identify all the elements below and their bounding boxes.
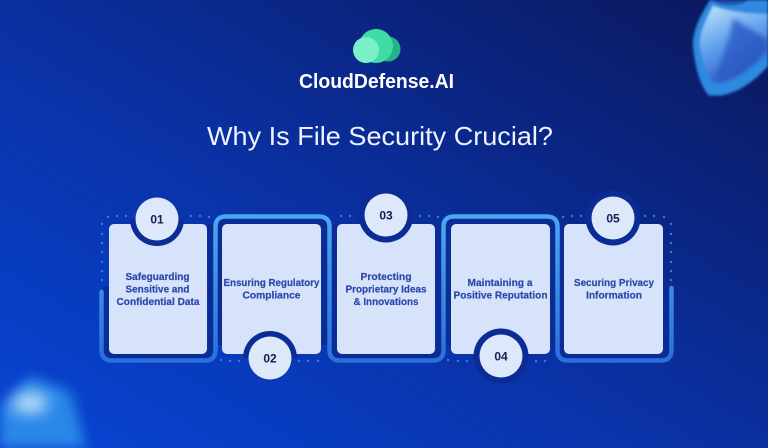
- logo icon: cloud: [353, 29, 400, 63]
- text: card 3 label: Proprietary Ideas: [346, 284, 427, 296]
- panel: card 3: [337, 224, 435, 354]
- text: card 4 label: Positive Reputation: [454, 290, 548, 302]
- badge 05: [586, 190, 640, 246]
- panel: card 4: [451, 224, 550, 354]
- text: card 4 label: Maintaining a: [468, 278, 533, 289]
- badge 02: [243, 331, 297, 380]
- badge 03: [358, 188, 414, 242]
- badge 02: 02: [263, 352, 277, 366]
- text: card 2 label: Ensuring Regulatory: [224, 278, 320, 289]
- logo wordmark: CloudDefense.AI: [299, 71, 454, 93]
- badge 03: 03: [379, 208, 393, 222]
- icon: shield top right: [693, 0, 768, 96]
- text: card 1 label: [116, 272, 200, 308]
- panel: card 1: [109, 224, 207, 354]
- badge 05: 05: [606, 212, 620, 226]
- badge 04: 04: [494, 350, 508, 364]
- text: card 1 label: Safeguarding: [126, 272, 190, 283]
- panel: card 5: [564, 224, 663, 354]
- text: card 4 label: [454, 278, 548, 302]
- text: card 1 label: Sensitive and: [126, 284, 190, 296]
- text: card 5 label: Information: [586, 290, 642, 302]
- text: card 2 label: Compliance: [242, 290, 301, 302]
- text: card 5 label: [574, 278, 654, 302]
- panel: card 2: [222, 224, 321, 354]
- title: Why Is File Security Crucial?: [207, 121, 553, 151]
- text: card 3 label: [346, 272, 427, 308]
- icon: blurred shield bottom left: [0, 376, 86, 448]
- serpentine connector frame: [102, 216, 672, 360]
- badge 04: [474, 328, 528, 384]
- text: card 3 label: Protecting: [360, 272, 412, 283]
- badge 01: [130, 198, 184, 246]
- text: card 3 label: & Innovations: [354, 297, 419, 308]
- text: card 2 label: [224, 278, 320, 302]
- text: card 5 label: Securing Privacy: [574, 278, 654, 289]
- badge 01: 01: [150, 212, 164, 226]
- decorative dots: [101, 215, 672, 362]
- text: card 1 label: Confidential Data: [116, 297, 200, 308]
